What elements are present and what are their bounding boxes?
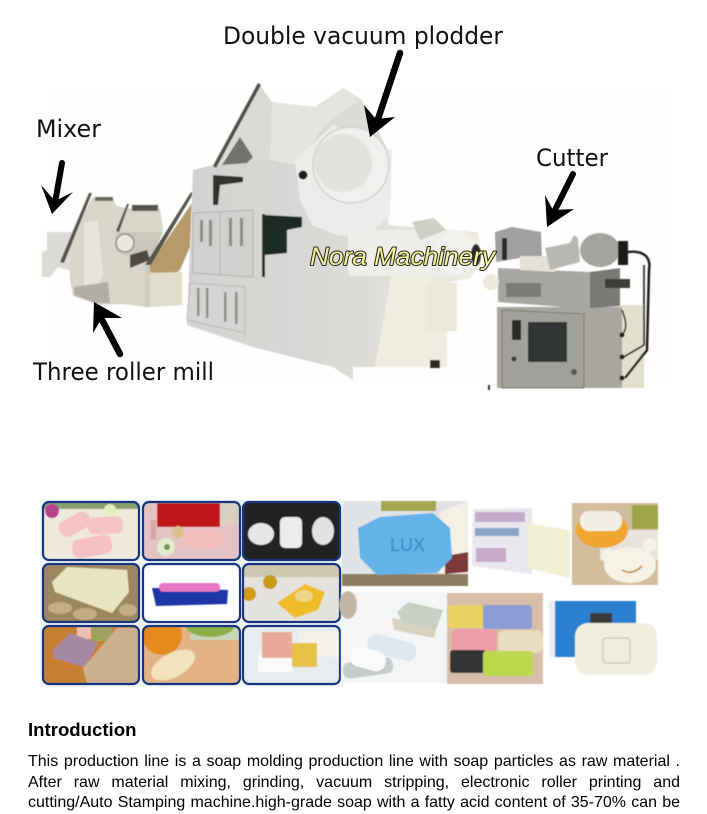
- watermark: Nora Machinery: Nora Machinery: [310, 243, 497, 271]
- photo: blue LUX soap: [342, 501, 468, 586]
- introduction paragraph: [28, 753, 680, 811]
- photo: pink soap in blue dish: [143, 564, 240, 622]
- photo: boxed white soap: [472, 508, 570, 578]
- label: Three roller mill: Three roller mill: [32, 358, 214, 386]
- photo: cream soap on wicker: [43, 564, 139, 622]
- soap product photo collage: [40, 500, 658, 687]
- introduction paragraph: This production line is a soap molding production line with soap particles as raw material .: [28, 753, 680, 770]
- photo: soap with orange: [144, 627, 239, 683]
- photo: colored Korean soap bars: [447, 593, 543, 684]
- photo: Persona pink soap: [143, 502, 240, 560]
- photo: pink soaps with flower: [43, 502, 139, 560]
- photo backdrop: [42, 88, 675, 390]
- photo: Savon soap cubes: [243, 626, 340, 684]
- machine: cutter: [483, 227, 649, 390]
- arrow: to mixer: [41, 163, 73, 214]
- machine: double vacuum plodder: [187, 83, 482, 380]
- collage backdrop: [40, 500, 343, 687]
- photo: purple soap and loofah: [43, 626, 139, 684]
- photo: bear soap dishes: [572, 503, 658, 585]
- introduction paragraph: After raw material mixing, grinding, vacuum stripping, electronic roller printing and: [28, 774, 680, 791]
- machine: mixer and three roller mill: [42, 192, 193, 307]
- machinery photo panel: [32, 22, 675, 390]
- label: Cutter: Cutter: [536, 144, 608, 172]
- arrow: to plodder: [364, 53, 400, 137]
- label: Double vacuum plodder: Double vacuum plodder: [223, 22, 503, 50]
- heading: Introduction: Introduction: [28, 719, 136, 740]
- introduction paragraph: cutting/Auto Stamping machine.high-grade soap with a fatty acid content of 35-70% can be: [28, 794, 680, 811]
- arrow: to cutter: [545, 174, 574, 227]
- soap thumbnail frames: [43, 502, 340, 684]
- photo: blue LUX soap: LUX: [390, 535, 425, 555]
- photo: white soap dishes: [339, 591, 447, 683]
- arrow: to three roller mill: [93, 302, 122, 354]
- photo: cow brand soap and box: [549, 601, 657, 675]
- photo: yellow soap on towel: [242, 564, 340, 622]
- photo: white soaps on black: [243, 502, 340, 560]
- label: Mixer: Mixer: [36, 115, 101, 143]
